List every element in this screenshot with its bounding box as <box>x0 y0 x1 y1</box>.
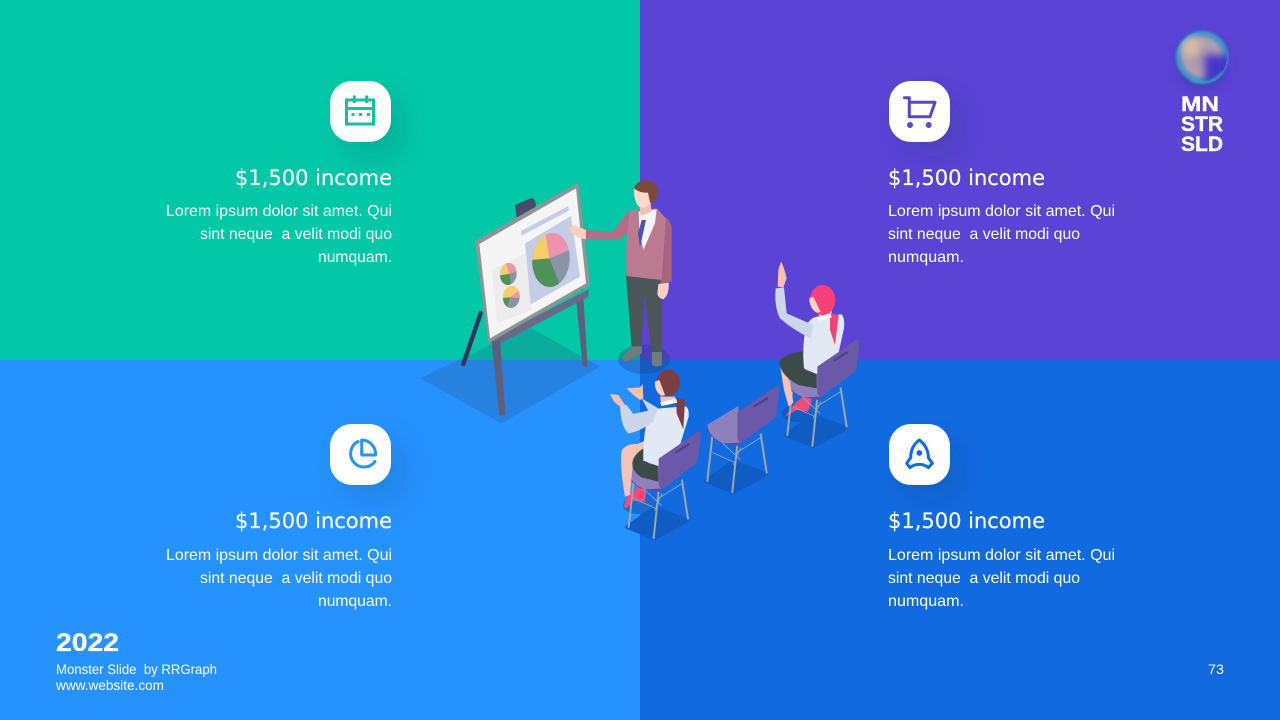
large pie <box>532 233 570 287</box>
illustration: presenter at easel <box>420 180 672 423</box>
panel: dark blue background <box>640 360 1280 720</box>
heading: $1,500 income <box>235 166 392 190</box>
logo <box>1176 31 1235 156</box>
text block: numquam. <box>888 593 964 610</box>
icon: calendar <box>330 81 391 142</box>
logo text: MN <box>1181 93 1219 116</box>
panel: top right income <box>888 81 1115 266</box>
text block: Lorem ipsum dolor sit amet. Qui <box>166 547 392 564</box>
icon: rocket <box>889 424 950 485</box>
text block: sint neque a velit modi quo <box>888 570 1080 587</box>
footer credits: 2022 <box>56 629 119 657</box>
text block: sint neque a velit modi quo <box>200 570 392 587</box>
logo orb <box>1176 31 1235 90</box>
woman with raised hand <box>775 262 859 446</box>
text block: numquam. <box>888 249 964 266</box>
footer credits: Monster Slide by RRGraph <box>56 662 217 677</box>
icon: pie chart <box>330 424 391 485</box>
text block: sint neque a velit modi quo <box>200 226 392 243</box>
easel with chart board <box>463 183 590 416</box>
text block: Lorem ipsum dolor sit amet. Qui <box>166 203 392 220</box>
text block: numquam. <box>318 249 392 266</box>
heading: $1,500 income <box>888 509 1045 533</box>
heading: $1,500 income <box>235 509 392 533</box>
text block <box>166 547 392 610</box>
easel shadow <box>420 327 600 423</box>
panel: light blue background <box>0 360 640 720</box>
panel: bottom right income <box>888 424 1115 610</box>
logo text: SLD <box>1181 133 1223 156</box>
woman clapping <box>610 369 701 538</box>
text block: sint neque a velit modi quo <box>888 226 1080 243</box>
text block: Lorem ipsum dolor sit amet. Qui <box>888 203 1115 220</box>
heading: $1,500 income <box>888 166 1045 190</box>
text block: numquam. <box>318 593 392 610</box>
logo text <box>1181 93 1223 156</box>
text block <box>888 547 1115 610</box>
chair: empty <box>706 386 779 492</box>
presenter <box>568 180 672 374</box>
page number: 73 <box>1208 662 1224 677</box>
panel: purple background <box>640 0 1280 360</box>
text block: Lorem ipsum dolor sit amet. Qui <box>888 547 1115 564</box>
panel: green background <box>0 0 640 360</box>
text block <box>888 203 1115 266</box>
icon: shopping cart <box>889 81 950 142</box>
panel: bottom left income <box>166 424 392 610</box>
footer credits <box>55 629 217 693</box>
footer credits: www.website.com <box>55 678 164 693</box>
text block <box>166 203 392 266</box>
logo text: STR <box>1181 113 1223 136</box>
illustration: seated audience <box>610 262 859 538</box>
panel: top left income <box>166 81 392 266</box>
small pies <box>500 263 517 285</box>
